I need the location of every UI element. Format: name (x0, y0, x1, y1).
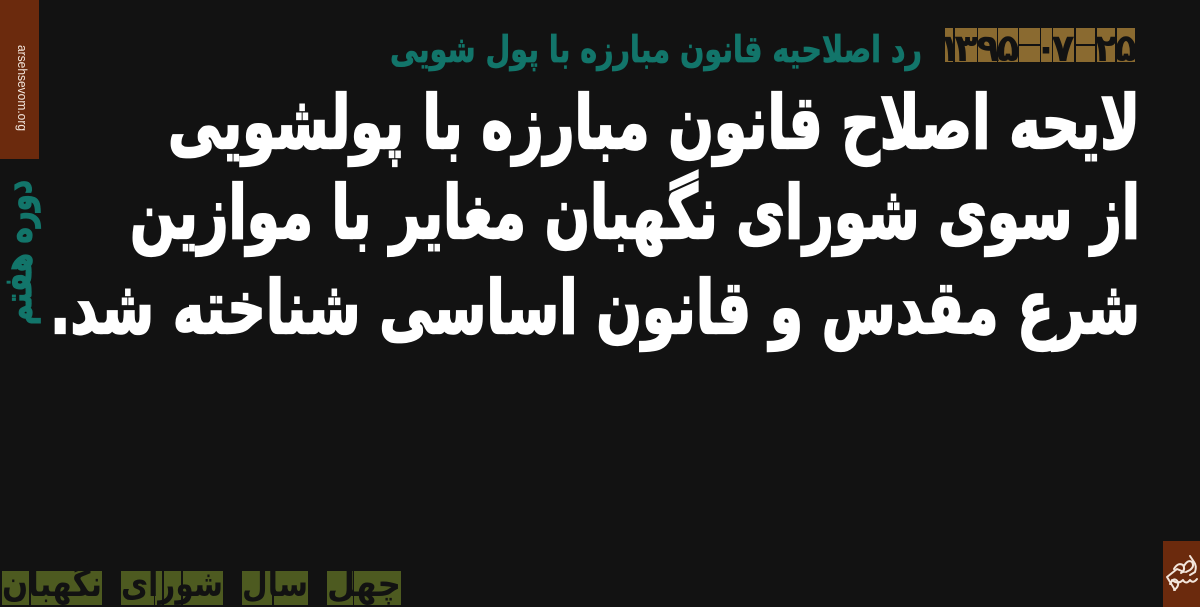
footer text: چهل (327, 564, 401, 605)
footer text: شورای (121, 564, 223, 605)
main headline (50, 80, 1140, 352)
date digits: ۰ (1034, 26, 1058, 70)
panel: website tab (0, 0, 39, 159)
date digits: ۲ (1094, 26, 1118, 70)
date badge (938, 26, 1138, 70)
footer text: سال (242, 564, 308, 605)
footer text: نگهبان (2, 563, 102, 605)
date digits: ۵ (1114, 26, 1138, 70)
footer text (2, 563, 401, 605)
website address: arsehsevom.org (15, 45, 30, 131)
icon: calligraphic logo (1163, 541, 1200, 607)
date digits: ۷ (1051, 26, 1075, 70)
date digits: ۱ (938, 26, 962, 70)
footer badge: forty years of the Guardian Council (2, 563, 401, 605)
date digits: ۵ (996, 26, 1020, 70)
date digits (938, 26, 1138, 70)
date digits: ۹ (976, 26, 1000, 70)
date digits: ۳ (954, 26, 978, 70)
subtitle: رد اصلاحیه قانون مبارزه با پول شویی (390, 28, 922, 71)
